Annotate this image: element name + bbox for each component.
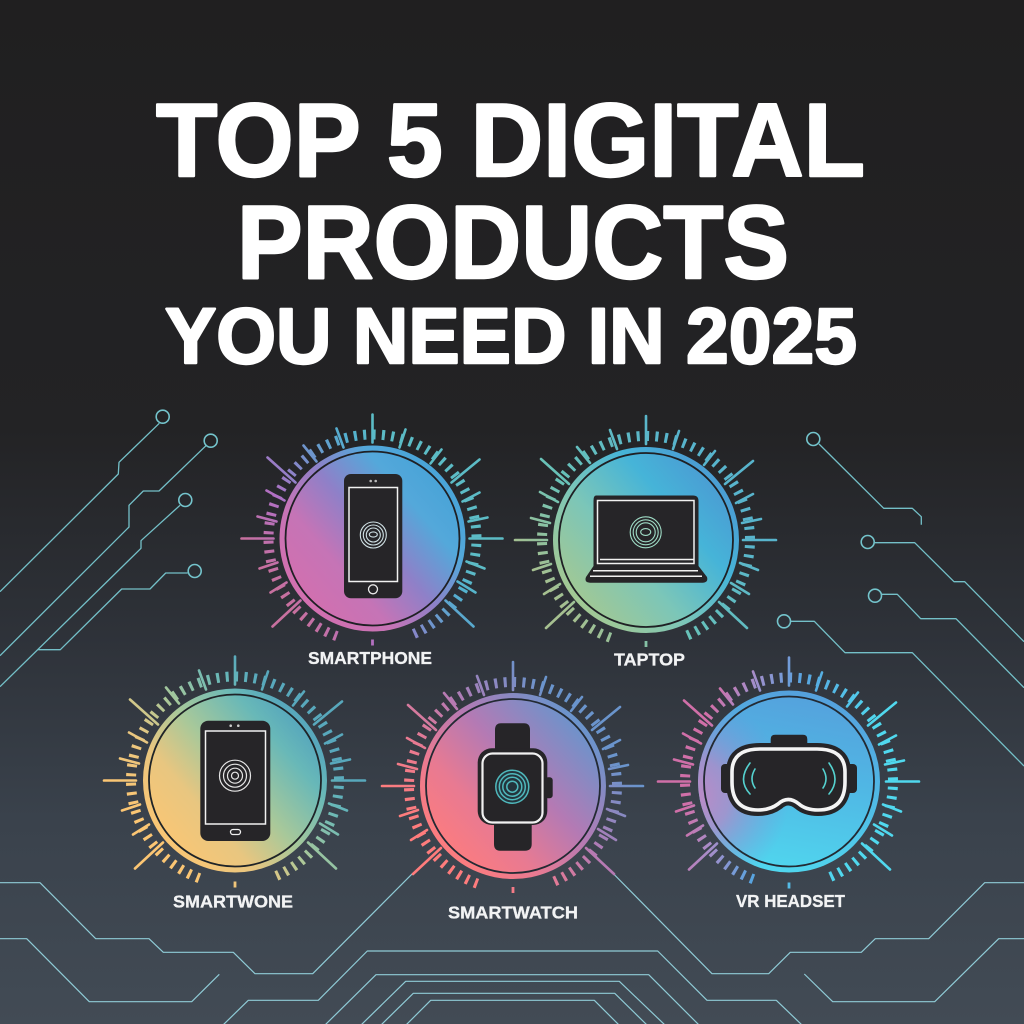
label: TAPTOP bbox=[614, 650, 685, 670]
gradient disc with radial ticks bbox=[382, 662, 643, 893]
circuit lines: upper right bbox=[778, 432, 1024, 766]
icon: tablet phone bbox=[200, 721, 270, 841]
badge: smartwatch bbox=[382, 662, 643, 922]
label: SMARTWATCH bbox=[448, 902, 578, 922]
gradient disc with radial ticks bbox=[515, 416, 776, 647]
icon: smartphone bbox=[344, 474, 402, 598]
icon: laptop bbox=[586, 496, 707, 583]
gradient disc with radial ticks bbox=[104, 656, 365, 888]
badge: smartphone bbox=[242, 414, 502, 668]
circuit lines: upper left bbox=[0, 410, 217, 687]
icon: vr headset bbox=[721, 735, 857, 810]
gradient disc with radial ticks bbox=[242, 414, 502, 646]
label: SMARTPHONE bbox=[308, 648, 432, 668]
label: VR HEADSET bbox=[736, 891, 845, 911]
circuit lines: bottom bbox=[0, 850, 1024, 1024]
badge: laptop bbox=[515, 416, 776, 670]
title line 1: TOP 5 DIGITAL bbox=[156, 83, 865, 199]
badge: vr headset bbox=[658, 658, 919, 911]
title line 2: PRODUCTS bbox=[237, 185, 789, 301]
title line 3: YOU NEED IN 2025 bbox=[165, 291, 857, 380]
label: SMARTWONE bbox=[173, 892, 293, 912]
icon: smartwatch bbox=[478, 723, 553, 851]
title bbox=[156, 83, 865, 380]
gradient disc with radial ticks bbox=[658, 658, 919, 888]
badge: smartwone bbox=[104, 656, 365, 912]
